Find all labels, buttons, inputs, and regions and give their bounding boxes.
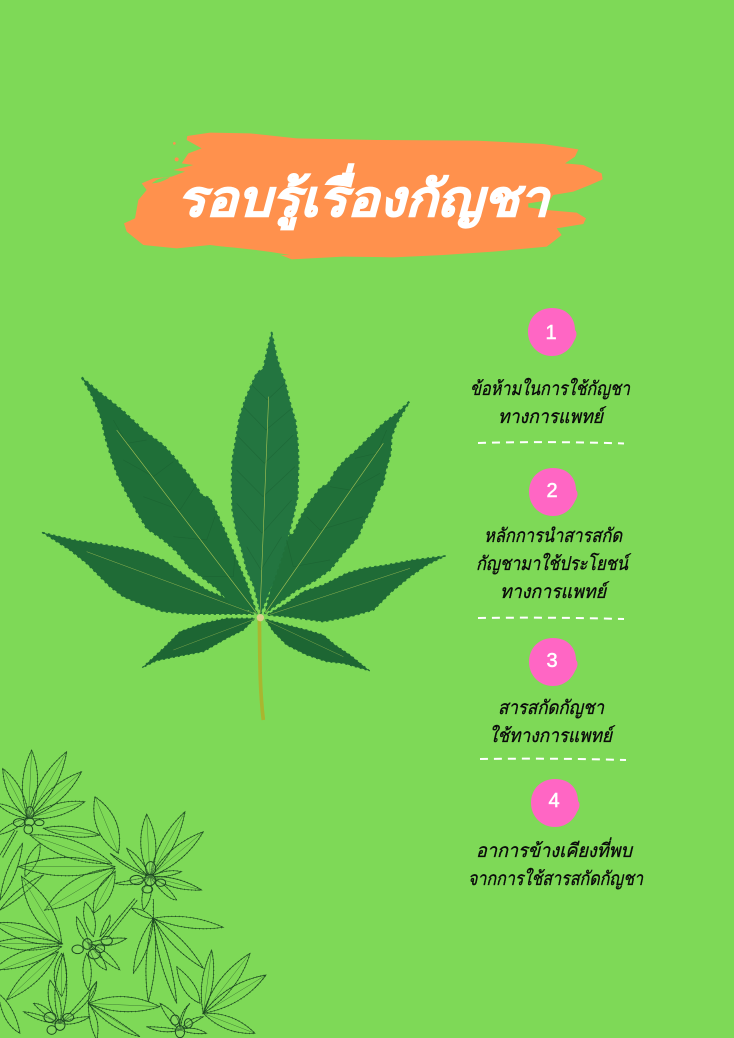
- number badge 3: 3: [546, 650, 558, 672]
- cannabis leaf: [43, 333, 445, 720]
- leaflet: right low: [267, 556, 445, 622]
- title banner: [124, 133, 603, 259]
- label 2: กัญชามาใช้ประโยชน์: [476, 552, 632, 575]
- leaflet: upper right: [265, 402, 409, 613]
- label 1: ทางการแพทย์: [498, 406, 607, 428]
- leaf base node: [257, 614, 264, 621]
- label 4: [468, 837, 644, 890]
- number badge 2: [529, 468, 578, 516]
- leaf midribs: [87, 397, 410, 657]
- leaflet: bottom right: [265, 619, 369, 671]
- flower buds: [13, 807, 192, 1038]
- leaflet: left low: [43, 533, 253, 614]
- label 3: [489, 698, 616, 747]
- number badge 2: 2: [546, 480, 558, 502]
- list item 2: [476, 468, 632, 603]
- leaflet: upper left: [82, 377, 257, 613]
- list item 3: [489, 638, 616, 747]
- label 3: ใช้ทางการแพทย์: [489, 724, 616, 747]
- label 2: หลักการนำสารสกัด: [484, 526, 623, 547]
- leaf veins: [113, 383, 387, 577]
- label 1: [470, 377, 631, 428]
- leaf stem: [259, 618, 263, 720]
- list item 1: [470, 308, 631, 428]
- label 4: อาการข้างเคียงที่พบ: [476, 837, 634, 862]
- label 2: ทางการแพทย์: [500, 581, 610, 603]
- number badge 4: [531, 779, 580, 827]
- line-art cannabis plants: [0, 750, 266, 1038]
- number badge 1: 1: [545, 322, 557, 344]
- leaf midribs, line art: [0, 750, 266, 1037]
- orange brush stroke: [124, 133, 603, 259]
- leaflet: bottom left: [142, 618, 255, 668]
- label 3: สารสกัดกัญชา: [498, 698, 605, 719]
- label 4: จากการใช้สารสกัดกัญชา: [468, 867, 644, 890]
- leaf outlines: [0, 750, 266, 1038]
- title text: รอบรู้เรื่องกัญชา: [177, 163, 551, 230]
- number badge 1: [528, 308, 577, 356]
- number badge 4: 4: [548, 790, 560, 812]
- label 2: [476, 526, 632, 603]
- label 1: ข้อห้ามในการใช้กัญชา: [470, 377, 631, 400]
- leaflet: centre: [232, 333, 299, 613]
- list item 4: [468, 779, 644, 890]
